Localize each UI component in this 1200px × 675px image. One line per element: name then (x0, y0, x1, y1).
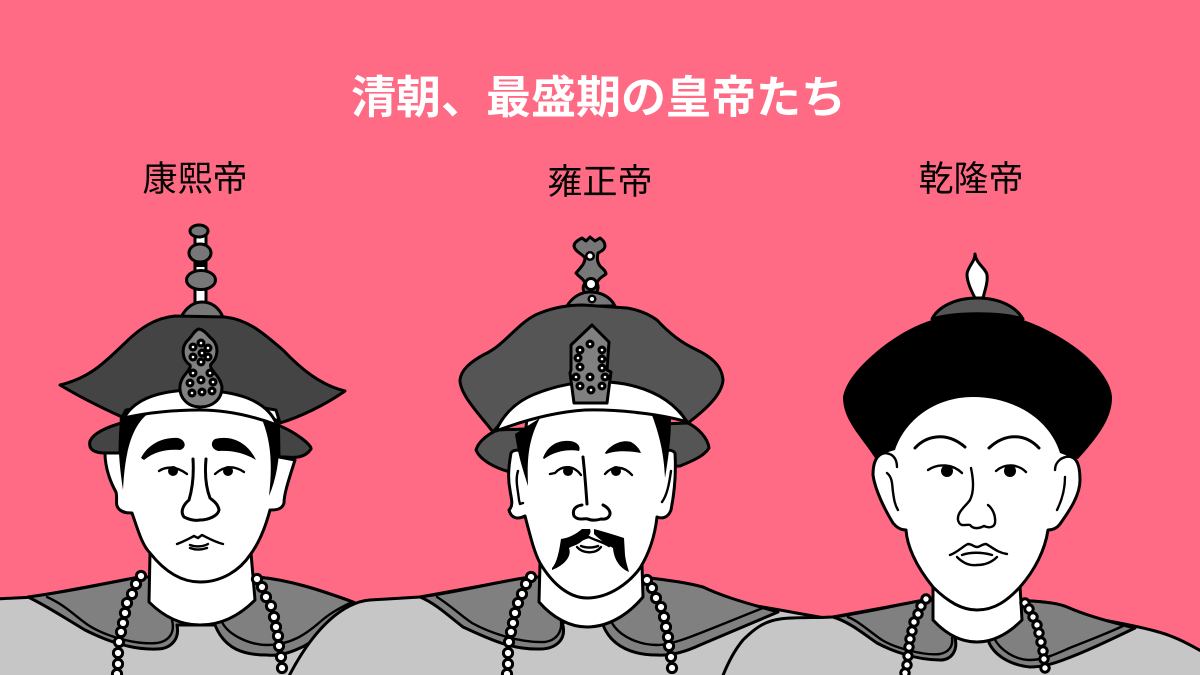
robe (722, 600, 1200, 675)
face (509, 395, 675, 598)
title: 清朝、最盛期の皇帝たち (351, 72, 846, 123)
figure: Kangxi Emperor (0, 225, 400, 675)
mouth (950, 544, 1007, 565)
nose (583, 457, 587, 504)
face (105, 400, 295, 582)
ear details (884, 453, 1073, 510)
eyes (928, 465, 1026, 477)
hat crown (60, 316, 345, 423)
neck (933, 586, 1022, 642)
finial (181, 225, 223, 317)
mouth (177, 535, 223, 544)
neck (539, 563, 643, 627)
mouth (572, 537, 609, 546)
prayer beads (112, 571, 287, 675)
prayer beads (901, 595, 1049, 675)
hat band (124, 390, 277, 425)
face (873, 385, 1080, 610)
robe (288, 577, 825, 675)
eyes (159, 466, 244, 476)
hat band (496, 382, 687, 431)
hat crown (460, 305, 723, 432)
neck (149, 553, 255, 625)
collar (420, 577, 778, 655)
hat dome (932, 298, 1023, 319)
finial (967, 254, 987, 298)
label: Kangxi: 康熙帝 (142, 160, 248, 199)
prayer beads (502, 572, 677, 675)
label: Qianlong: 乾隆帝 (918, 160, 1024, 199)
collar (833, 600, 1135, 667)
eyebrows (915, 437, 965, 448)
nose (182, 459, 219, 520)
plaque jewel (570, 325, 611, 403)
eyes (550, 466, 632, 476)
hat (843, 314, 1112, 459)
gourd jewel (180, 329, 222, 407)
moustache (552, 529, 629, 572)
label: Yongzheng: 雍正帝 (547, 163, 653, 202)
eyebrows (141, 438, 256, 460)
figure: Qianlong Emperor (722, 254, 1200, 675)
hair (119, 408, 280, 496)
nose (958, 468, 995, 528)
brim flaps (90, 422, 311, 457)
ear details (517, 471, 671, 504)
figure: Yongzheng Emperor (288, 237, 825, 675)
robe (0, 577, 400, 675)
finial (567, 237, 615, 306)
brim (476, 423, 709, 472)
eyebrows (543, 441, 641, 459)
hair (515, 410, 671, 486)
collar (28, 577, 353, 655)
